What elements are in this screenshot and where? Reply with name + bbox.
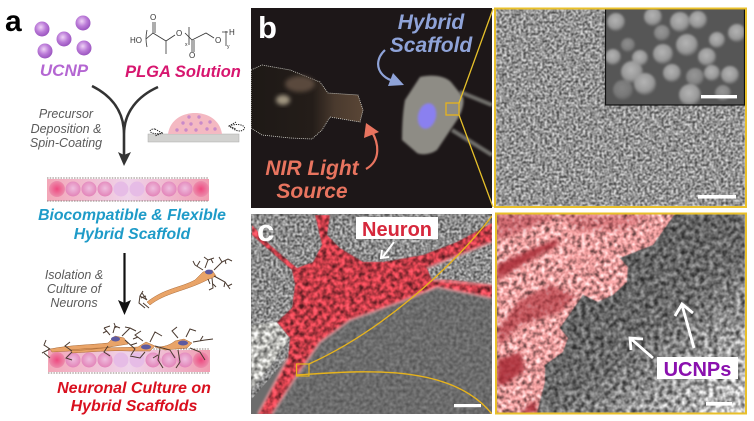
- chemical structure: PLGA: y: [227, 44, 230, 50]
- label: hybrid scaffold: Hybrid: [398, 11, 465, 34]
- yellow connectors b to SEM: [459, 9, 493, 207]
- text: precursor deposition step: Spin-Coating: [30, 136, 102, 150]
- yellow frame: [495, 8, 746, 207]
- heading: biocompatible scaffold: Hybrid Scaffold: [74, 226, 191, 243]
- NIR light source device: [251, 65, 363, 139]
- arrows to UCNPs: [630, 304, 694, 358]
- panel b: photo of hybrid scaffold: [251, 8, 492, 208]
- arrow: to light source: [364, 123, 379, 169]
- panel: SEM of scaffold surface: [495, 8, 746, 207]
- chemical structure: PLGA: O: [215, 36, 221, 45]
- text: isolation step: Culture of: [47, 282, 103, 296]
- chemical structure: PLGA: x: [185, 42, 188, 48]
- scale bar: [706, 402, 732, 406]
- panel a: fabrication workflow: [5, 5, 245, 415]
- arrow: to scaffold: [378, 50, 404, 86]
- zoom box on scaffold: [446, 103, 459, 115]
- hybrid scaffold sample: [402, 76, 463, 154]
- chemical structure: PLGA: H: [229, 28, 235, 37]
- UCNP substrate: [497, 214, 745, 413]
- chemical structure: PLGA: O: [150, 13, 156, 22]
- scale bar: [454, 404, 481, 407]
- neuron edge highlight: [258, 242, 492, 414]
- heading: UCNP: UCNP: [40, 61, 89, 80]
- tweezers: [452, 92, 492, 155]
- label: NIR light source: NIR Light: [265, 157, 360, 180]
- panel label c: c: [257, 213, 274, 248]
- panel label b: b: [258, 10, 277, 45]
- label: NIR light source: Source: [276, 180, 348, 203]
- arrow: to neuron: [381, 242, 394, 258]
- label: Neuron: Neuron: [362, 219, 432, 241]
- inset scale bar: [701, 95, 737, 98]
- icon: spin coating droplet: [148, 113, 245, 142]
- panel d: magnified neuron edge and UCNPs: [496, 214, 746, 414]
- neuron body: [252, 215, 492, 414]
- illustration: hybrid scaffold: [47, 178, 209, 201]
- icon: UCNP particles: [34, 16, 92, 58]
- arrow: to neuron culture: [118, 253, 131, 315]
- text: precursor deposition step: Deposition &: [31, 122, 101, 136]
- heading: neuronal culture: Neuronal Culture on: [57, 380, 211, 397]
- panel label a: a: [5, 5, 22, 38]
- text: isolation step: Neurons: [50, 296, 98, 310]
- scale bar: [698, 195, 736, 199]
- icon: neuron: [139, 257, 232, 308]
- neuron membrane: [497, 214, 675, 413]
- arrow: merging Y arrow: [92, 86, 158, 166]
- zoom curves: [296, 216, 492, 414]
- chemical structure: PLGA: O: [176, 29, 182, 38]
- yellow frame: [496, 214, 746, 414]
- inset frame: [606, 9, 744, 105]
- heading: biocompatible scaffold: Biocompatible & Flexible: [38, 207, 226, 224]
- heading: PLGA Solution: PLGA Solution: [125, 63, 241, 81]
- chemical structure: PLGA: [130, 13, 235, 60]
- membrane dark folds: [497, 215, 650, 413]
- label: UCNPs: UCNPs: [664, 359, 731, 381]
- chemical structure: PLGA: HO: [130, 36, 142, 45]
- chemical structure: PLGA: O: [189, 51, 195, 60]
- illustration: neuronal culture on scaffold: [42, 323, 213, 373]
- panel c: neuron SEM: [251, 213, 492, 414]
- label: hybrid scaffold: Scaffold: [390, 34, 473, 57]
- light debris: [251, 322, 290, 390]
- heading: neuronal culture: Hybrid Scaffolds: [71, 398, 198, 415]
- zoom box on neuron: [296, 364, 309, 376]
- text: isolation step: Isolation &: [45, 268, 103, 282]
- smooth lower substrate: [258, 287, 492, 414]
- inset: high magnification SEM: [605, 8, 746, 106]
- text: precursor deposition step: Precursor: [39, 107, 94, 121]
- textured upper substrate: [251, 214, 492, 400]
